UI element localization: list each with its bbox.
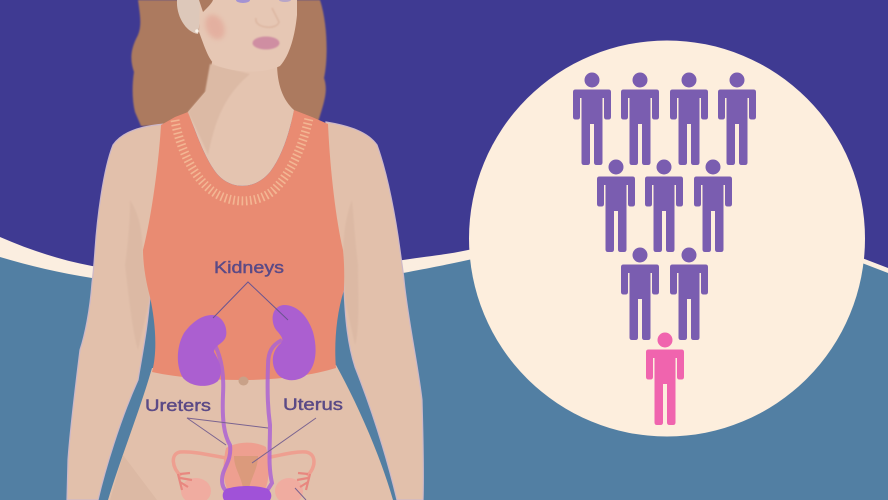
figures: affected group — [573, 72, 756, 340]
background: cream wave — [0, 231, 888, 300]
pelvis shading — [110, 455, 157, 500]
figure: highlighted pink person — [646, 332, 684, 425]
hair — [131, 0, 327, 126]
Uterus text: Uterus — [283, 395, 343, 414]
cream circle — [469, 40, 865, 436]
hair at temple — [199, 0, 213, 12]
face — [199, 0, 297, 72]
hips and abdomen — [108, 365, 393, 500]
arm shading left — [125, 200, 150, 350]
left ovary — [181, 478, 211, 500]
neck shadow — [188, 64, 250, 155]
arm shading right — [343, 200, 358, 345]
panel: circle of figures — [469, 40, 865, 436]
tank top ribbed neckline — [175, 118, 309, 201]
Kidneys leader lines — [213, 282, 288, 320]
right fallopian tube — [266, 452, 314, 476]
right ureter — [265, 340, 282, 494]
left arm — [67, 124, 175, 500]
ear — [177, 0, 203, 34]
lips — [252, 36, 280, 50]
organs: urinary and reproductive systems — [173, 305, 316, 500]
blush — [201, 11, 229, 43]
Ureters text: Ureters — [145, 396, 211, 415]
left eye — [236, 0, 250, 3]
right ovary — [275, 478, 303, 500]
label: Kidneys — [213, 258, 288, 320]
left fimbriae — [178, 473, 192, 490]
right kidney — [273, 305, 316, 380]
illustration: woman — [67, 0, 423, 500]
tank top — [143, 110, 344, 380]
right eye — [279, 0, 291, 2]
background: blue ground — [0, 240, 888, 500]
bladder — [223, 486, 271, 500]
Ureters leader lines — [187, 418, 268, 445]
nose — [256, 8, 279, 27]
label: Ureters — [145, 396, 268, 445]
left ureter — [215, 345, 230, 492]
left fallopian tube — [173, 452, 226, 476]
figure row 1 — [573, 72, 756, 165]
right fimbriae — [297, 473, 310, 490]
figure row 2 — [597, 160, 732, 252]
left kidney — [178, 315, 226, 386]
reproductive tract — [173, 443, 314, 500]
label: Uterus — [252, 395, 343, 463]
navel — [238, 376, 248, 386]
earring — [195, 29, 199, 33]
Uterus leader line — [252, 418, 316, 463]
uterus — [224, 443, 269, 497]
leader line: ovary — [295, 488, 306, 500]
neck and chest — [188, 62, 294, 186]
figure row 3 — [621, 248, 708, 340]
right arm — [320, 122, 423, 500]
Kidneys text: Kidneys — [214, 258, 284, 277]
uterus inner — [234, 456, 258, 488]
